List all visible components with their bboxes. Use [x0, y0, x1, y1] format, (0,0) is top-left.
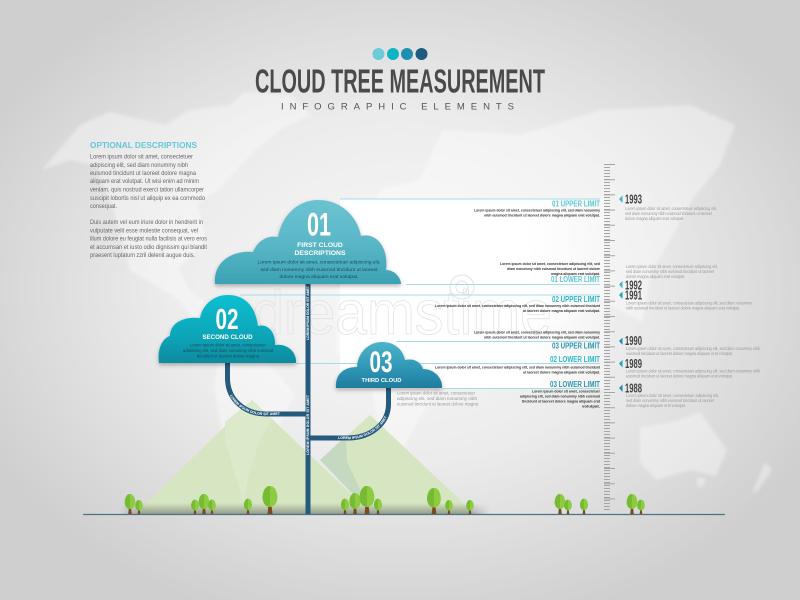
limit lines [240, 199, 600, 388]
03 lower limit: 03 LOWER LIMIT [550, 380, 600, 389]
year 1990: euismod tincidunt ut laoreet dolore magna aliquam erat volutpat. [626, 351, 733, 356]
watermark: dreamstime [252, 279, 552, 348]
tree trunk and branches [228, 284, 388, 514]
year 1988: dolore magna aliquam erat volutpat. [626, 403, 686, 408]
body text: veniam, quis nostrud exerci tation ullamcorper [90, 186, 205, 194]
body text: Lorem ipsum dolor sit amet, consectetuer [90, 154, 194, 160]
03 upper limit: Lorem ipsum dolor sit amet, consectetuer adipiscing elit, sed diam nonummy [474, 330, 601, 334]
year 1989 [619, 356, 760, 378]
cloud 02: adipiscing elit, sed diam nonummy nibh euismod [183, 348, 273, 353]
ground line [83, 514, 725, 516]
year 1992: dolore magna aliquam erat volutpat. [626, 274, 685, 279]
cloud shape [159, 295, 296, 363]
world map [42, 92, 772, 503]
cloud 03 [336, 342, 442, 388]
year 1989: 1989 [625, 356, 642, 371]
year 1988: 1988 [625, 380, 642, 396]
01 lower limit: Lorem ipsum dolor sit amet, consectetuer adipiscing elit, sed [500, 261, 600, 266]
03 lower limit: adipiscing elit, sed diam nonummy nibh euismod [520, 394, 600, 398]
number: 01 [307, 206, 331, 242]
year 1988: sed diam nonummy nibh euismod tincidunt ut laoreet [626, 398, 715, 403]
01 lower limit [500, 261, 601, 284]
year 1989: Lorem ipsum dolor sit amet, consectetuer adipiscing elit, sed diam nonummy nibh [626, 368, 760, 374]
trunk and branch labels: LOREM IPSUM DOLOR SIT AMET [230, 394, 280, 416]
mountains [135, 400, 475, 514]
cloud 01: DESCRIPTIONS [295, 250, 346, 257]
cloud 02: tincidunt ut laoreet dolore magna [197, 354, 259, 358]
year 1991: Lorem ipsum dolor sit amet, consectetuer adipiscing elit, sed diam nonummy [626, 300, 753, 306]
trees [125, 486, 645, 514]
01 upper limit: 01 UPPER LIMIT [552, 200, 600, 208]
02 upper limit [435, 295, 601, 313]
02 upper limit: ut laoreet dolore magna aliquam erat volutpat. [523, 308, 600, 313]
02 upper limit: 02 UPPER LIMIT [552, 295, 600, 304]
year 1991 [619, 288, 753, 310]
02 upper limit: Lorem ipsum dolor sit amet, consectetuer adipiscing elit, sed diam nonummy nibh euismod tincidunt [435, 303, 601, 308]
year 1993: dolore magna aliquam erat volutpat. [625, 216, 684, 221]
03 lower limit: volutpat. [582, 404, 600, 408]
trunk and branch labels: LOREM IPSUM DOLOR SIT AMET [306, 285, 310, 340]
third cloud description: Lorem ipsum dolor sit amet, consectetuer [397, 390, 476, 396]
01 lower limit: magna aliquam erat volutpat. [551, 271, 600, 276]
year 1992: 1992 [625, 278, 642, 292]
subtitle: INFOGRAPHIC ELEMENTS [281, 102, 514, 112]
year 1991: 1991 [625, 288, 642, 302]
trunk and branch labels [230, 285, 386, 455]
third cloud description: adipiscing elit, sed diam nonummy nibh [397, 396, 478, 401]
title: CLOUD TREE MEASUREMENT [255, 62, 545, 100]
body text: aliquam erat volutpat. Ut wisi enim ad minim [90, 178, 199, 185]
body text: suscipit lobortis nisl ut aliquip ex ea commodo [90, 195, 205, 202]
body text: euismod tincidunt ut laoreet dolore magna [90, 170, 196, 177]
cloud text: Lorem ipsum dolor sit amet, consectetuer adipiscing elit, [258, 260, 380, 264]
measuring ruler [607, 164, 610, 512]
body text: praesent luptatum zzril delenit augue duis. [90, 252, 195, 259]
body text [90, 154, 208, 259]
01 upper limit [474, 200, 601, 218]
number: 02 [216, 304, 238, 336]
year 1991: nibh euismod tincidunt ut laoreet dolore magna aliquam erat volutpat. [626, 306, 740, 310]
02 lower limit: Lorem ipsum dolor sit amet, consectetuer adipiscing elit, sed diam nonummy nibh euismod tincidunt [435, 364, 601, 370]
year 1992: sed diam nonummy nibh euismod tincidunt ut laoreet [626, 269, 715, 274]
body text: et accumsan et iusto odio dignissim qui blandit [90, 244, 207, 251]
third cloud description: euismod tincidunt ut laoreet dolore magna [397, 402, 479, 406]
body text: illum dolore eu feugiat nulla facilisis at vero eros [90, 236, 208, 242]
number: 03 [370, 346, 392, 379]
03 lower limit: tincidunt ut laoreet dolore magna aliquam erat [522, 398, 601, 404]
heading: OPTIONAL DESCRIPTIONS [90, 140, 197, 150]
cloud title: FIRST CLOUD [297, 242, 343, 249]
year 1993: sed diam nonummy nibh euismod tincidunt ut laoreet [625, 211, 713, 216]
white measurement band [340, 199, 606, 389]
year 1989: euismod tincidunt ut laoreet dolore magna aliquam erat volutpat. [626, 374, 733, 378]
03 lower limit [520, 380, 601, 408]
02 lower limit [435, 355, 601, 374]
trunk and branch labels: LOREM IPSUM DOLOR SIT AMET [338, 416, 386, 440]
optional descriptions [90, 140, 208, 259]
title dots [372, 48, 428, 60]
cloud shape [336, 342, 442, 388]
year 1993 [619, 192, 717, 221]
year 1988 [619, 380, 719, 408]
03 upper limit: nibh euismod tincidunt ut laoreet dolore magna aliquam erat volutpat. [484, 334, 600, 340]
cloud 01: sed diam nonummy nibh euismod tincidunt ut laoreet [260, 267, 378, 272]
cloud 01: dolore magna aliquam erat volutpat. [280, 274, 358, 279]
year 1990: Lorem ipsum dolor sit amet, consectetuer adipiscing elit, sed diam nonummy nibh [626, 346, 760, 351]
03 upper limit [474, 330, 601, 350]
cloud text: Lorem ipsum dolor sit amet, consectetuer [190, 342, 266, 348]
body text: adipiscing elit, sed diam nonummy nibh [90, 162, 188, 169]
year 1990: 1990 [625, 333, 642, 348]
01 upper limit: Lorem ipsum dolor sit amet, consectetuer adipiscing elit, sed diam nonummy [474, 208, 601, 212]
year 1988: Lorem ipsum dolor sit amet, consectetuer adipiscing elit, [626, 393, 719, 398]
cloud title: THIRD CLOUD [362, 378, 401, 384]
03 upper limit: 03 UPPER LIMIT [552, 342, 600, 350]
cloud 01 [215, 200, 401, 284]
02 lower limit: 02 LOWER LIMIT [550, 355, 600, 364]
03 lower limit: Lorem ipsum dolor sit amet, consectetuer [532, 388, 600, 394]
body text: vulputate velit esse molestie consequat, vel [90, 227, 198, 234]
year 1992: Lorem ipsum dolor sit amet, consectetuer adipiscing elit, [626, 264, 718, 269]
year 1992 [619, 264, 718, 292]
year 1993: Lorem ipsum dolor sit amet, consectetuer adipiscing elit, [625, 206, 717, 211]
01 lower limit: diam nonummy nibh euismod tincidunt ut laoreet dolore [507, 266, 601, 271]
cloud 02 [159, 295, 296, 363]
cloud shape [215, 200, 401, 284]
01 upper limit: nibh euismod tincidunt ut laoreet dolore magna aliquam erat volutpat. [484, 212, 600, 218]
body text: consequat. [90, 203, 117, 210]
02 lower limit: ut laoreet dolore magna aliquam erat volutpat. [523, 370, 600, 374]
01 lower limit: 01 LOWER LIMIT [551, 275, 600, 284]
body text: Duis autem vel eum iriure dolor in hendrerit in [90, 219, 203, 226]
cloud title: SECOND CLOUD [202, 334, 253, 341]
trunk and branch labels: LOREM IPSUM DOLOR SIT AMET [306, 394, 310, 455]
year 1990 [619, 333, 760, 356]
third cloud description [397, 390, 479, 406]
year 1993: 1993 [625, 192, 642, 206]
ground shadow [123, 504, 487, 514]
